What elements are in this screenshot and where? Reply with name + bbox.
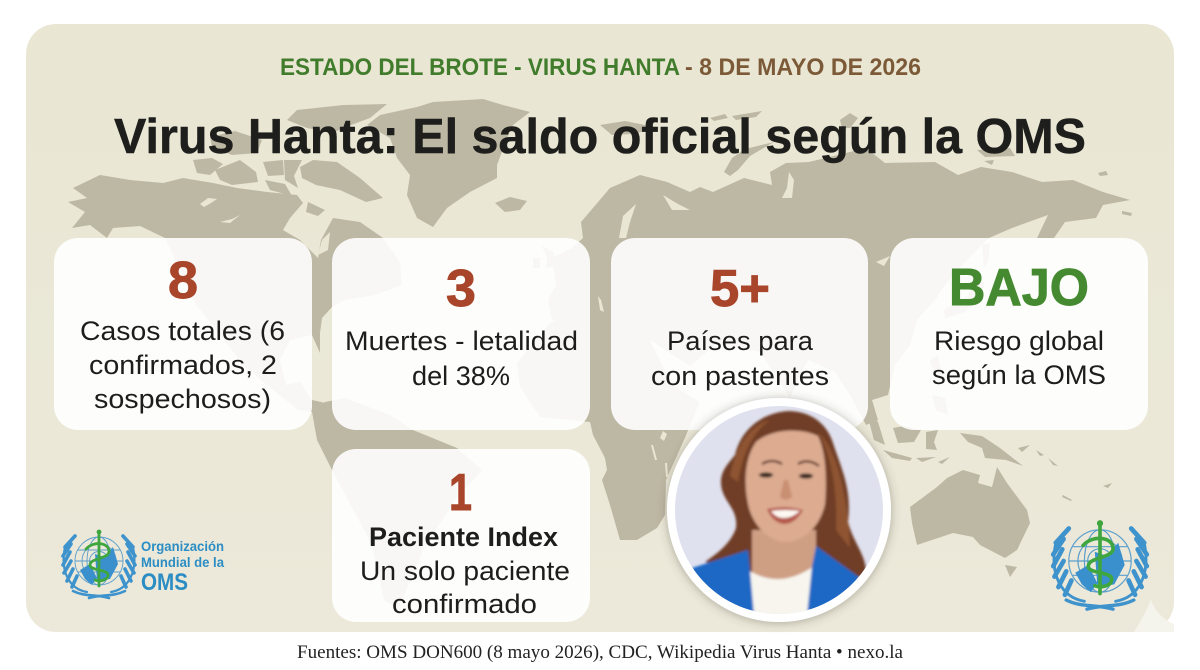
card: countries: 5+ xyxy=(710,260,770,318)
card: total cases: Casos totales (6 xyxy=(80,316,285,346)
card: countries xyxy=(651,260,829,391)
neck xyxy=(752,530,816,584)
world map xyxy=(68,99,1132,610)
card: countries: con pastentes xyxy=(651,361,829,391)
card: index patient: 1 xyxy=(449,464,472,522)
card: deaths: 3 xyxy=(446,260,476,318)
header line xyxy=(280,54,921,81)
Canadian islands xyxy=(210,131,262,155)
Iceland xyxy=(495,197,527,212)
hair xyxy=(705,411,866,578)
card: deaths: Muertes - letalidad xyxy=(345,326,578,356)
title: Virus Hanta: El saldo oficial según la OMS xyxy=(114,110,1086,164)
Ellesmere xyxy=(287,104,387,133)
North America xyxy=(68,175,402,412)
header line: - 8 DE MAYO DE 2026 xyxy=(685,54,921,81)
card: index patient: Un solo paciente xyxy=(360,556,570,586)
blue blazer xyxy=(692,548,756,612)
face xyxy=(746,431,826,542)
card: total cases: 8 xyxy=(168,252,198,310)
Eurasia xyxy=(548,148,1130,425)
South America xyxy=(312,400,458,470)
card: total cases: sospechosos) xyxy=(94,384,271,414)
white top xyxy=(748,566,814,614)
icon: WHO emblem right xyxy=(1053,520,1147,609)
map water details xyxy=(200,172,890,477)
card: global risk: Riesgo global xyxy=(934,326,1104,356)
UK and Ireland xyxy=(542,246,556,268)
icon: WHO emblem left xyxy=(63,530,135,598)
card: global risk: según la OMS xyxy=(932,360,1106,390)
organisation name: OMS xyxy=(141,569,188,596)
cards backdrop xyxy=(54,238,1148,622)
card: index patient: confirmado xyxy=(392,589,537,619)
card: index patient: Paciente Index xyxy=(369,522,558,552)
Greenland xyxy=(367,99,530,227)
Indonesia and Oceania xyxy=(870,420,885,445)
WHO logo with name, left xyxy=(63,530,224,598)
organisation name: Mundial de la xyxy=(141,554,224,570)
Australia xyxy=(910,467,1030,558)
header line: ESTADO DEL BROTE - VIRUS HANTA xyxy=(280,54,680,81)
portrait photo xyxy=(667,398,891,625)
card: deaths: del 38% xyxy=(412,361,510,391)
card: index patient xyxy=(360,464,570,619)
card: deaths xyxy=(345,260,578,391)
sources footer: Fuentes: OMS DON600 (8 mayo 2026), CDC, Wikipedia Virus Hanta • nexo.la xyxy=(297,642,904,663)
card: countries: Países para xyxy=(667,326,814,356)
organisation name: Organización xyxy=(141,538,224,554)
Africa xyxy=(584,318,688,540)
Japan and Philippines xyxy=(982,243,990,268)
card: total cases xyxy=(80,252,285,414)
card: global risk xyxy=(932,259,1106,390)
organisation name xyxy=(141,538,224,596)
corner highlight xyxy=(1134,600,1174,632)
card: global risk: BAJO xyxy=(949,259,1089,317)
Arctic islands xyxy=(600,121,660,135)
card: total cases: confirmados, 2 xyxy=(89,350,277,380)
